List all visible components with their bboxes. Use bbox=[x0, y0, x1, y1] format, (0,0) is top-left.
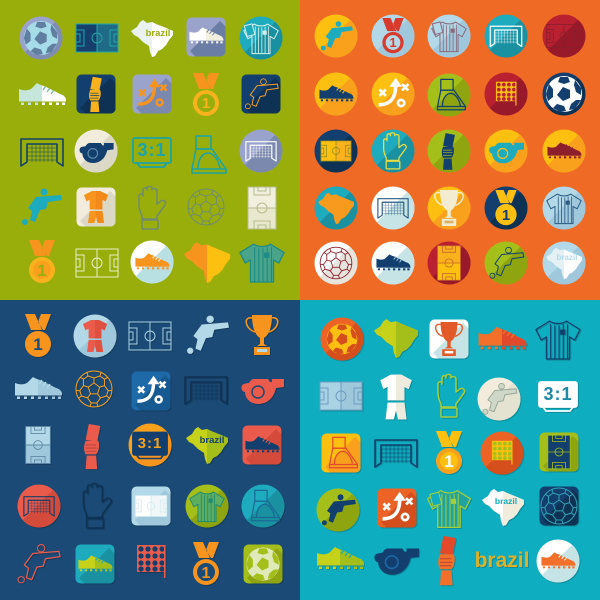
icon: orange outline ball bbox=[76, 371, 113, 409]
icon: medal on navy circle bbox=[484, 186, 536, 238]
icon: scoreboard on orange circle: 3:1 bbox=[138, 435, 162, 452]
icon: ball on navy square bbox=[540, 486, 589, 536]
icon: teal scoreboard: 3:1 bbox=[137, 140, 167, 160]
icon: cream brazil map: brazil bbox=[495, 496, 517, 506]
icon: coral player outline bbox=[18, 545, 60, 583]
icon: glove on teal circle bbox=[372, 130, 423, 181]
icon: orange boot bbox=[479, 327, 526, 349]
icon: navy goal bbox=[21, 139, 63, 166]
panel: navy icon set bbox=[0, 300, 300, 600]
icon: white kit bbox=[380, 375, 412, 419]
icon: yellow pitch on navy circle bbox=[314, 130, 366, 181]
icon: jersey on light blue circle bbox=[542, 186, 594, 238]
icon: jersey in teal circle bbox=[240, 16, 291, 68]
icon: goal on teal circle bbox=[484, 14, 536, 66]
icon: goal on coral circle bbox=[18, 484, 69, 536]
icon: player on yellow circle bbox=[314, 14, 366, 66]
icon: green striped jersey bbox=[428, 491, 470, 527]
icon: pale boot bbox=[19, 83, 66, 105]
icon: coral flag bbox=[137, 545, 166, 578]
icon: vertical blue pitch bbox=[26, 427, 50, 463]
icon: orange boot on white circle bbox=[536, 540, 588, 591]
icon: yellow medal bbox=[436, 431, 462, 474]
icon: tactics on blue square bbox=[132, 372, 181, 421]
icon: player on cream circle bbox=[478, 378, 529, 429]
icon: whistle on cream circle bbox=[74, 130, 126, 181]
icon: grey outline ball bbox=[188, 189, 225, 227]
icon: medal on light blue circle: 1 bbox=[389, 35, 397, 50]
icon: yellow ball on orange circle bbox=[320, 318, 372, 369]
icon: boot on coral square bbox=[242, 426, 292, 475]
icon: light blue pitch bbox=[320, 382, 362, 410]
icon: brazil on light blue circle bbox=[542, 242, 594, 293]
icon: cream brazil map bbox=[482, 489, 524, 526]
text: brazil wordmark: brazil bbox=[475, 549, 529, 572]
icon: goal in periwinkle circle bbox=[240, 130, 291, 181]
icon: medal on light blue circle bbox=[372, 14, 423, 66]
icon: navy pitch on green square bbox=[540, 432, 589, 482]
icon: goal on white circle bbox=[372, 186, 423, 238]
icon: green boot on teal square bbox=[76, 544, 125, 594]
icon: navy boot on white circle bbox=[372, 242, 423, 293]
icon: orange medal with ring: 1 bbox=[202, 95, 210, 112]
icon: kit on light blue circle bbox=[74, 314, 125, 366]
icon: navy pitch bbox=[76, 24, 118, 52]
icon: yellow pitch on red circle bbox=[428, 242, 479, 293]
icon: white brazil map: brazil bbox=[146, 28, 170, 39]
icon: orange medal with ring: 1 bbox=[202, 565, 211, 582]
panel: green icon set bbox=[0, 0, 300, 300]
icon: orange medal bbox=[25, 314, 51, 357]
icon: jersey on green circle bbox=[186, 484, 237, 536]
icon: navy hand on green circle bbox=[428, 130, 479, 181]
icon: solid medal: 1 bbox=[37, 261, 47, 280]
icon: green brazil map: brazil bbox=[200, 435, 224, 446]
icon: cream outline pitch bbox=[76, 249, 118, 277]
icon: scoreboard on orange circle bbox=[128, 424, 180, 475]
icon: grey glove bbox=[139, 186, 166, 229]
icon: red boot on yellow circle bbox=[542, 130, 594, 181]
icon: outline pitch bbox=[129, 322, 171, 350]
icon: orange trophy bbox=[246, 315, 278, 355]
icon: coral card hand bbox=[84, 424, 100, 469]
icon: player outline on green circle bbox=[484, 242, 536, 293]
icon: player on navy square bbox=[242, 74, 291, 124]
panel: orange icon set bbox=[300, 0, 600, 300]
icon: orange medal: 1 bbox=[33, 335, 43, 354]
panel: teal icon set bbox=[300, 300, 600, 600]
icon: white brazil map bbox=[131, 20, 173, 57]
icon: orange brazil map bbox=[184, 242, 230, 283]
icon: white scoreboard bbox=[539, 382, 577, 411]
icon: brazil on light blue circle: brazil bbox=[557, 253, 577, 262]
icon: pitch on red circle bbox=[542, 14, 594, 66]
icon: navy glove bbox=[83, 483, 111, 528]
icon: pitch on light blue square bbox=[132, 486, 181, 536]
icon: flag on red circle bbox=[484, 72, 536, 124]
icon: seat on green circle bbox=[428, 74, 479, 125]
icon: seat on teal circle bbox=[242, 484, 293, 536]
icon: tactics on yellow circle bbox=[372, 72, 423, 124]
icon: navy whistle bbox=[374, 548, 419, 575]
icon: ball on green square bbox=[244, 544, 293, 594]
icon: navy jersey bbox=[536, 321, 580, 359]
icon: orange boot on white circle bbox=[130, 240, 182, 292]
icon: kit on cream square bbox=[76, 188, 126, 237]
icon: tactics on periwinkle square bbox=[132, 74, 182, 124]
icon: outline ball on white circle bbox=[314, 242, 366, 293]
icon: dark goal bbox=[185, 377, 227, 404]
icon: green brazil map bbox=[374, 319, 418, 358]
icon: orange medal with ring bbox=[193, 73, 219, 116]
icon: teal player bbox=[22, 188, 62, 225]
icon: teal striped jersey bbox=[240, 244, 284, 282]
icon: orange medal with ring bbox=[193, 542, 219, 585]
icon: seat on yellow square bbox=[322, 434, 371, 483]
icon: green brazil map bbox=[186, 427, 228, 464]
icon: whistle on yellow circle bbox=[484, 130, 536, 181]
icon: vertical cream pitch bbox=[248, 187, 276, 229]
icon: green boot bbox=[317, 547, 364, 569]
icon: jersey on light blue circle bbox=[428, 14, 479, 66]
icon: teal seat bbox=[192, 136, 226, 173]
icon: trophy on white square bbox=[430, 320, 479, 369]
icon: boot on periwinkle square bbox=[186, 18, 236, 67]
icon: white ball on navy circle bbox=[542, 72, 594, 124]
icon: orange card hand bbox=[438, 536, 456, 585]
icon: orange brazil on teal circle bbox=[314, 186, 366, 238]
icon: teal scoreboard bbox=[133, 138, 171, 167]
icon: ball in periwinkle circle bbox=[20, 16, 71, 68]
icon: card hand on navy square bbox=[76, 74, 126, 124]
icon: tactics on orange square bbox=[378, 488, 427, 538]
icon: light blue boot bbox=[15, 377, 62, 399]
icon: white scoreboard: 3:1 bbox=[543, 384, 573, 404]
icon: coral whistle bbox=[241, 379, 284, 404]
icon: navy boot on yellow circle bbox=[314, 72, 366, 124]
icon: trophy on yellow circle bbox=[428, 186, 479, 238]
icon: light blue player bbox=[187, 316, 229, 354]
icon: navy goal bbox=[375, 440, 417, 467]
icon: flag on orange circle bbox=[480, 432, 532, 483]
icon: solid medal bbox=[29, 240, 55, 283]
icon: green glove outline bbox=[438, 374, 465, 417]
icon: yellow medal: 1 bbox=[444, 452, 454, 471]
icon: player on green circle bbox=[316, 488, 368, 540]
icon: medal on navy circle: 1 bbox=[502, 207, 510, 224]
